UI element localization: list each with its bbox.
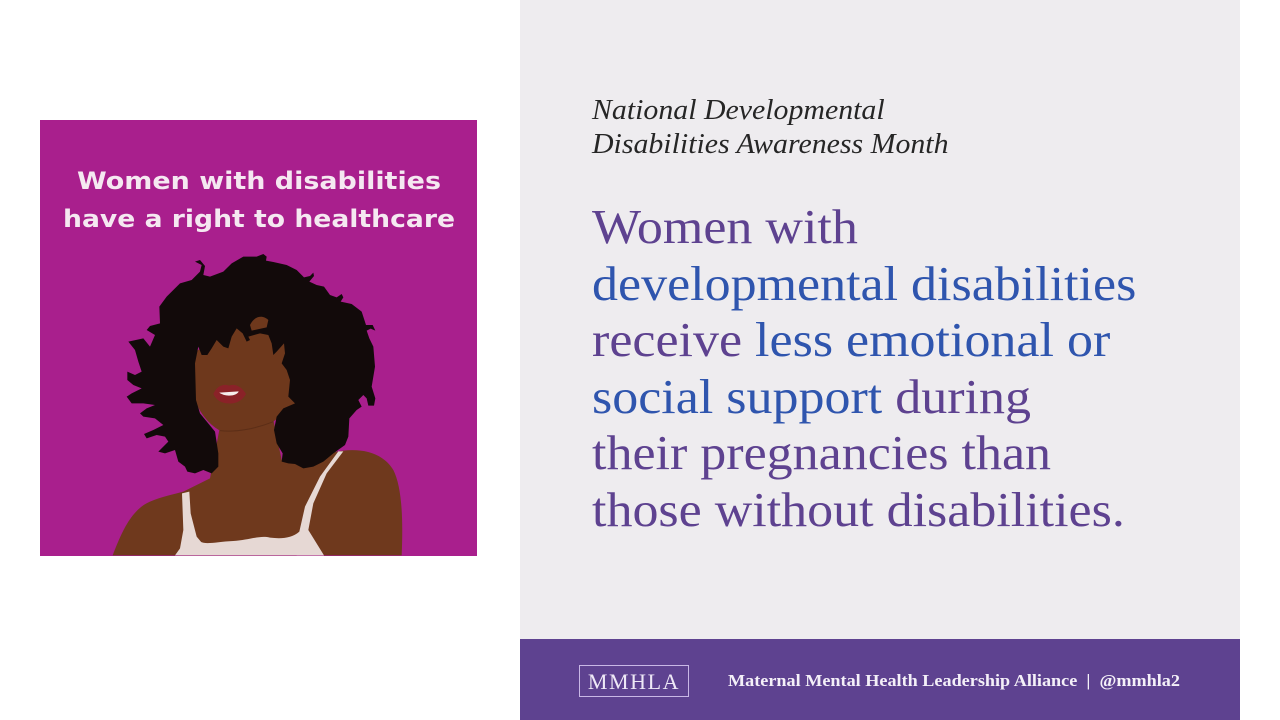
illustration: woman with curly hair on magenta poster bbox=[40, 120, 477, 556]
poster heading bbox=[63, 167, 455, 233]
face bbox=[193, 317, 297, 432]
main statement: their pregnancies than bbox=[592, 425, 1051, 480]
subtitle bbox=[592, 95, 949, 160]
body and neck bbox=[113, 420, 402, 555]
poster heading: Women with disabilities bbox=[77, 167, 441, 195]
logo: MMHLA: MMHLA bbox=[588, 669, 680, 694]
main statement: social support during bbox=[592, 369, 1031, 424]
main statement: Women with bbox=[592, 199, 858, 254]
right strap bbox=[297, 451, 343, 555]
chin line bbox=[220, 422, 273, 431]
figure bbox=[113, 254, 402, 555]
main statement: those without disabilities. bbox=[592, 482, 1125, 537]
subtitle: National Developmental bbox=[592, 95, 885, 126]
main statement bbox=[592, 199, 1136, 537]
lips bbox=[213, 385, 246, 403]
left strap bbox=[175, 492, 202, 555]
poster heading: have a right to healthcare bbox=[63, 205, 455, 233]
hair bbox=[127, 254, 375, 473]
main statement: developmental disabilities bbox=[592, 256, 1136, 311]
main statement: receive less emotional or bbox=[592, 312, 1110, 367]
footer bar bbox=[520, 639, 1240, 720]
subtitle: Disabilities Awareness Month bbox=[592, 129, 949, 160]
poster background bbox=[40, 120, 477, 556]
panel: text background bbox=[520, 0, 1240, 639]
logo: MMHLA bbox=[579, 665, 689, 697]
camisole top bbox=[175, 532, 324, 555]
forehead gap in hair bbox=[250, 317, 268, 331]
teeth bbox=[219, 391, 239, 396]
footer organisation text: Maternal Mental Health Leadership Alliance | @mmhla2 bbox=[728, 671, 1180, 690]
